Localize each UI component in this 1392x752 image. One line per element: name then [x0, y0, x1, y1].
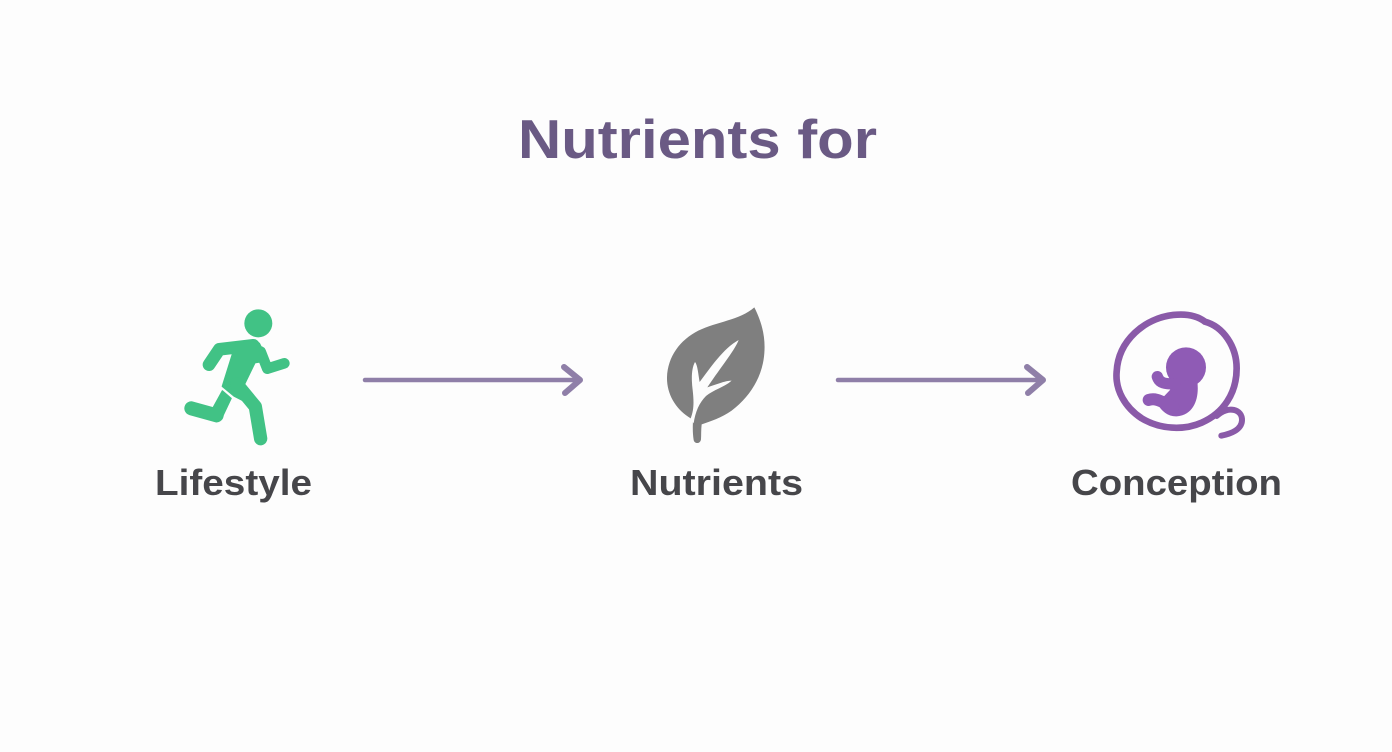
icon: embryo in womb [1116, 315, 1242, 436]
arrow: nutrients to conception [838, 367, 1043, 393]
label: lifestyle: Lifestyle [155, 462, 312, 503]
label: conception: Conception [1071, 462, 1282, 503]
title: Nutrients for [518, 108, 877, 170]
label: nutrients: Nutrients [630, 462, 803, 503]
icon: leaf [667, 307, 765, 443]
arrow: lifestyle to nutrients [365, 367, 580, 393]
step: nutrients [630, 307, 803, 503]
step: lifestyle [155, 309, 312, 503]
step: conception [1071, 315, 1282, 503]
icon: running figure [191, 309, 284, 439]
